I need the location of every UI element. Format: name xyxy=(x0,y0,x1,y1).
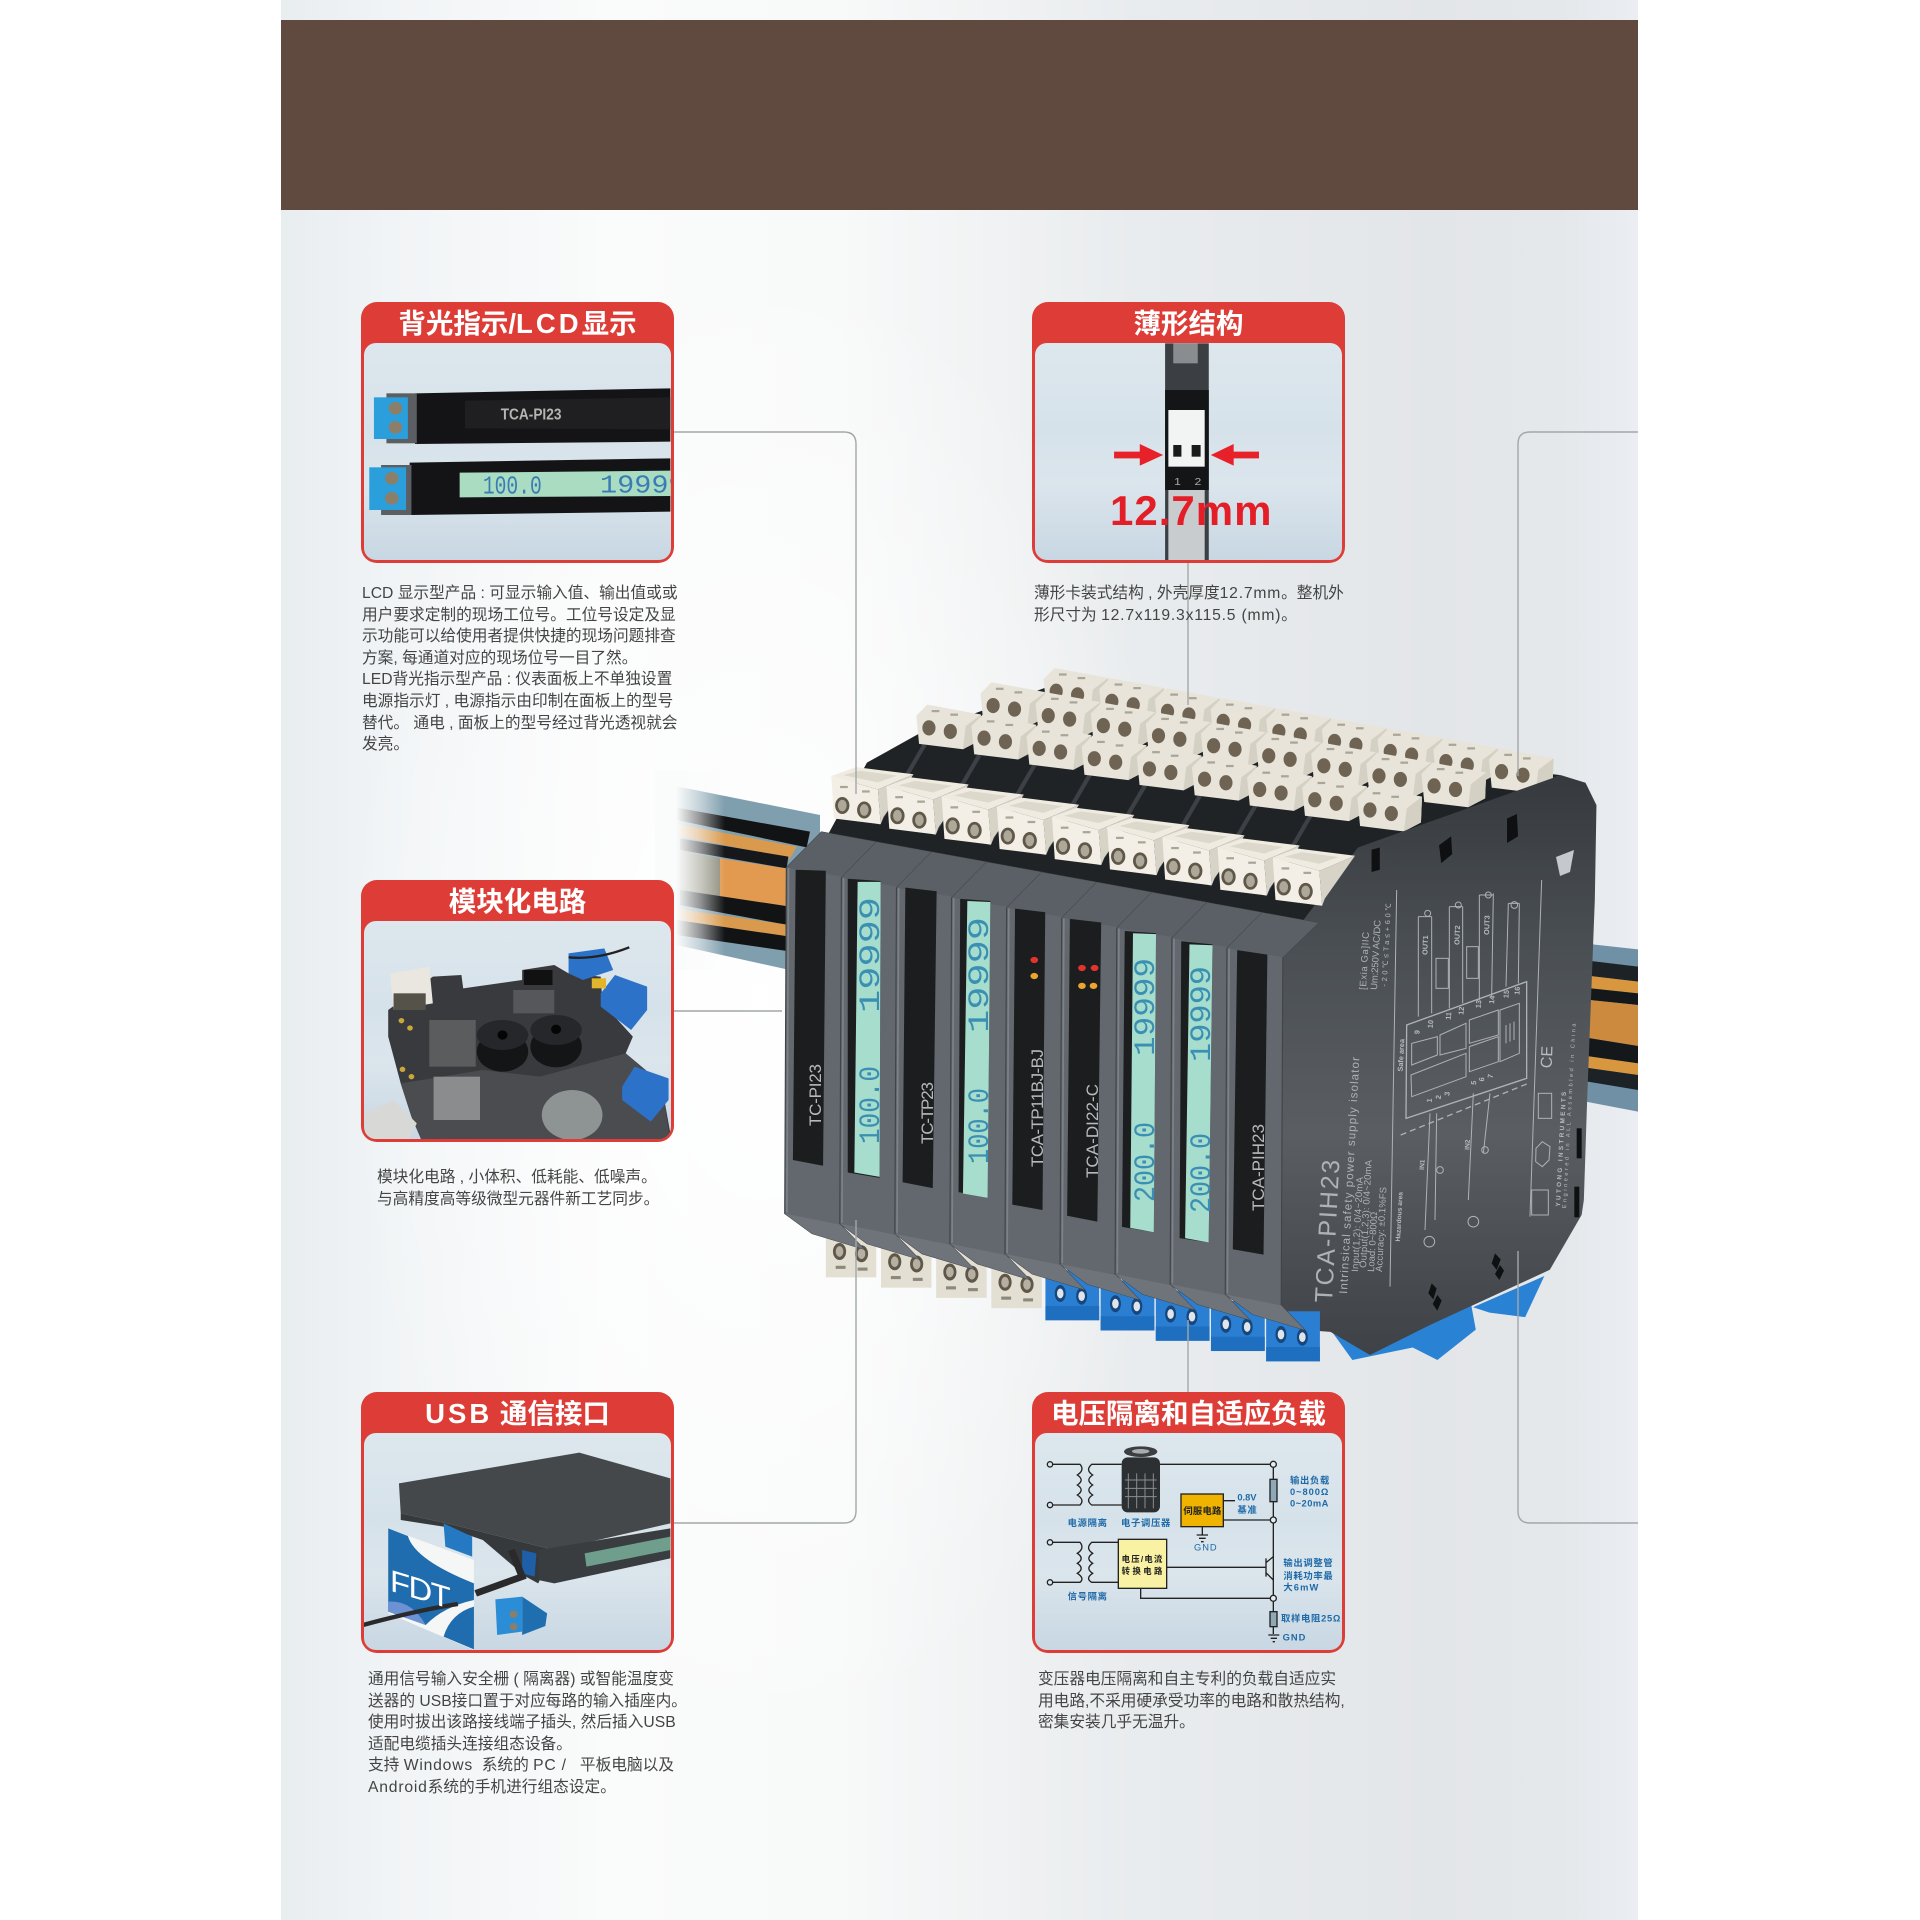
right DIN rail xyxy=(1577,943,1638,1112)
circuit labels: GND xyxy=(1283,1633,1306,1643)
text: LCD description: 示功能可以给使用者提供快捷的现场问题排查 xyxy=(362,628,676,645)
maker logo xyxy=(1556,850,1574,876)
silk text on side panel: 9 xyxy=(1412,1030,1422,1035)
photo: module end view with width arrows: 2 xyxy=(1194,477,1201,488)
photo: module end view with width arrows: 1 xyxy=(1174,477,1181,488)
side panel schematic xyxy=(1380,880,1582,1311)
circuit labels xyxy=(1068,1474,1341,1643)
text: modular circuit description xyxy=(377,1168,659,1208)
module labels: TCA-TP11BJ-BJ xyxy=(1028,1049,1047,1167)
module top ridges xyxy=(878,745,1310,896)
circuit labels: 电子调压器 xyxy=(1121,1517,1171,1528)
isolator module stack xyxy=(785,668,1596,1361)
front terminals xyxy=(831,767,1355,906)
text: USB description: 支持 Windows 系统的 PC / 平板电脑以及 xyxy=(368,1757,674,1774)
text: LCD description: 发亮。 xyxy=(362,736,409,753)
heading: voltage isolation: 电压隔离和自适应负载 xyxy=(1051,1398,1326,1429)
heading: modular circuit: 模块化电路 xyxy=(449,886,586,917)
silk text on side panel: 15 xyxy=(1501,990,1511,999)
module fronts xyxy=(785,832,1318,1330)
text: LCD description: 电源指示灯 , 电源指示由印制在面板上的型号 xyxy=(362,693,673,710)
regulator icon xyxy=(1122,1446,1160,1512)
side panel title text: Input(1,2): 0/4~20mA xyxy=(1350,1176,1366,1272)
silk text on side panel xyxy=(1380,902,1578,1242)
text: LCD description: LCD 显示型产品 : 可显示输入值、输出值或或 xyxy=(362,585,678,602)
circuit labels: 0.8V xyxy=(1237,1492,1257,1502)
left DIN rail xyxy=(670,785,820,977)
text: USB description: Android系统的手机进行组态设定。 xyxy=(368,1779,616,1796)
circuit labels: 0~20mA xyxy=(1290,1499,1329,1509)
converter box: 电压/电流 xyxy=(1122,1554,1163,1564)
text: voltage isolation description: 密集安装几乎无温升。 xyxy=(1038,1714,1195,1731)
text: voltage isolation description: 用电路,不采用硬承受功率的电路和散热结构, xyxy=(1038,1693,1345,1710)
circuit labels: 大6mW xyxy=(1283,1582,1319,1593)
LCD readouts xyxy=(855,897,1220,1213)
text: voltage isolation description xyxy=(1038,1670,1345,1731)
panel: modular circuit xyxy=(361,880,674,1142)
side panel title text: Intrinsical safety power supply isolator xyxy=(1338,1057,1362,1294)
status LEDs xyxy=(1030,957,1098,989)
photo: module end view with width arrows xyxy=(1035,343,1342,560)
servo circuit box: 伺服电路 xyxy=(1183,1505,1222,1516)
blue rear terminals xyxy=(1330,1276,1544,1360)
silk text on side panel: 10 xyxy=(1426,1020,1435,1029)
silk text on side panel: 3 xyxy=(1442,1091,1452,1096)
silk text on side panel: 14 xyxy=(1487,994,1497,1004)
module labels: TC-PI23 xyxy=(806,1064,825,1126)
silk text on side panel: Hazardous area xyxy=(1395,1192,1405,1242)
module labels: TCA-PIH23 xyxy=(1249,1124,1268,1211)
brown header block xyxy=(281,20,1638,210)
text: LCD description xyxy=(362,584,678,753)
side slots lower xyxy=(1428,1128,1582,1311)
text: LCD description: LED背光指示型产品 : 仪表面板上不单独设置 xyxy=(362,671,672,688)
silk text on side panel: -20℃≤Ta≤+60℃ xyxy=(1380,902,1393,987)
silk text on side panel: 13 xyxy=(1474,1000,1483,1009)
LCD readouts: 100.0 xyxy=(964,1088,998,1164)
silk text on side panel: CE xyxy=(1539,1046,1556,1068)
side panel title text xyxy=(1310,920,1389,1303)
text: LCD description: 方案, 每通道对应的现场位号一目了然。 xyxy=(362,650,637,667)
background band xyxy=(281,0,1638,1920)
side panel title text: Output(1,2,3): 0/4~20mA xyxy=(1358,1159,1375,1268)
silk text on side panel: OUT2 xyxy=(1452,925,1462,945)
text: USB description: 送器的 USB接口置于对应每路的输入插座内。 xyxy=(368,1693,687,1710)
dark top base xyxy=(826,687,1561,932)
circuit labels: 信号隔离 xyxy=(1068,1590,1107,1601)
circuit labels: GND xyxy=(1194,1542,1217,1552)
text: USB description: 使用时拔出该路接线端子插头, 然后插入USB xyxy=(368,1714,676,1731)
LCD readouts: 19999 xyxy=(1130,958,1164,1056)
converter box: 转换电路 xyxy=(1122,1566,1163,1576)
LCD readouts: 200.0 xyxy=(1186,1133,1220,1213)
silk text on side panel: 2 xyxy=(1434,1095,1443,1100)
circuit labels: 输出负载 xyxy=(1290,1474,1330,1485)
converter box xyxy=(1118,1539,1167,1588)
text: USB description xyxy=(368,1670,687,1796)
circuit diagram xyxy=(1035,1433,1342,1650)
photo: circuit board xyxy=(364,921,671,1139)
text: LCD description: 替代。 通电 , 面板上的型号经过背光透视就会 xyxy=(362,715,678,732)
photo: USB connection and FDT: FDT xyxy=(390,1563,451,1616)
side panel title text: Load: 0~800Ω xyxy=(1366,1212,1380,1272)
heading: USB interface: USB 通信接口 xyxy=(425,1398,610,1429)
silk text on side panel: OUT1 xyxy=(1420,935,1430,955)
photo: two black modules xyxy=(364,343,671,560)
LCD readouts: 19999 xyxy=(855,897,889,1013)
text: voltage isolation description: 变压器电压隔离和自主专利的负载自适应实 xyxy=(1038,1671,1336,1688)
silk text on side panel: 1 xyxy=(1425,1098,1434,1103)
circuit labels: 0~800Ω xyxy=(1290,1487,1329,1497)
silk text on side panel: OUT3 xyxy=(1482,915,1492,935)
LCD readouts: 19999 xyxy=(1186,966,1220,1062)
photo: USB connection and FDT xyxy=(364,1433,671,1650)
silk text on side panel: YUTONG INSTRUMENTS xyxy=(1555,1092,1568,1207)
text: thin structure description: 薄形卡装式结构 , 外壳厚度12.7mm。整机外 xyxy=(1034,585,1344,602)
servo circuit box xyxy=(1181,1494,1223,1527)
bottom terminals xyxy=(826,1229,1320,1361)
silk text on side panel: 6 xyxy=(1477,1077,1486,1082)
LCD screens xyxy=(854,882,1213,1243)
module windows xyxy=(793,870,1267,1255)
silk text on side panel: 7 xyxy=(1486,1074,1495,1079)
side panel title text: Um:250V AC/DC xyxy=(1369,920,1384,990)
module labels xyxy=(806,1049,1268,1211)
silk text on side panel: 5 xyxy=(1469,1080,1478,1085)
side panel title text: Accuracy: ±0.1%FS xyxy=(1374,1187,1389,1272)
side slots xyxy=(1372,814,1518,872)
heading: backlight / LCD: 背光指示/LCD显示 xyxy=(398,308,637,339)
heading: thin structure: 薄形结构 xyxy=(1134,308,1244,339)
text: USB description: 适配电缆插头连接组态设备。 xyxy=(368,1736,572,1753)
silk text on side panel: IN2 xyxy=(1464,1139,1472,1150)
rail left fade xyxy=(655,770,725,970)
photo: two black modules: 100.0 xyxy=(483,473,542,502)
circuit labels: 消耗功率最 xyxy=(1283,1570,1333,1581)
side face xyxy=(1281,775,1596,1355)
silk text on side panel: 11 xyxy=(1444,1012,1453,1020)
side panel title text: TCA-PIH23 xyxy=(1310,1159,1345,1303)
panel: voltage isolation and adaptive load xyxy=(1032,1392,1345,1653)
circuit labels: 电源隔离 xyxy=(1068,1517,1107,1528)
panel: backlight / LCD display xyxy=(361,302,674,563)
rear terminal rows xyxy=(916,668,1554,831)
circuit labels: 输出调整管 xyxy=(1283,1557,1333,1568)
silk text on side panel: Safe area xyxy=(1396,1038,1406,1072)
silk text on side panel: IN1 xyxy=(1419,1159,1427,1170)
text: USB description: 通用信号输入安全栅 ( 隔离器) 或智能温度变 xyxy=(368,1671,674,1688)
silk text on side panel: Engineered in ALL Assembled in China xyxy=(1562,1023,1578,1208)
silk text on side panel: 16 xyxy=(1512,986,1522,995)
LCD readouts: 200.0 xyxy=(1130,1122,1164,1202)
panel: USB interface xyxy=(361,1392,674,1653)
LCD readouts: 100.0 xyxy=(855,1066,889,1144)
text: modular circuit description: 与高精度高等级微型元器件新工艺同步。 xyxy=(377,1191,659,1208)
circuit labels: 取样电阻25Ω xyxy=(1281,1612,1341,1623)
text: modular circuit description: 模块化电路 , 小体积、低耗能、低噪声。 xyxy=(377,1169,657,1186)
connector lines xyxy=(673,432,1638,1523)
module labels: TC-TP23 xyxy=(918,1082,937,1144)
silk text on side panel: 12 xyxy=(1456,1006,1466,1015)
photo: two black modules: TCA-PI23 xyxy=(501,407,562,423)
text: thin structure description xyxy=(1034,584,1344,624)
side panel title text: [Exia Ga]IIC xyxy=(1358,932,1372,990)
circuit labels: 基准 xyxy=(1237,1504,1257,1515)
text: LCD description: 用户要求定制的现场工位号。工位号设定及显 xyxy=(362,607,676,624)
LCD readouts: 19999 xyxy=(964,917,998,1033)
module labels: TCA-DI22-C xyxy=(1083,1084,1102,1178)
photo: module end view with width arrows: 12.7mm xyxy=(1110,487,1272,534)
text: thin structure description: 形尺寸为 12.7x119.3x115.5 (mm)。 xyxy=(1034,607,1297,624)
panel: thin structure xyxy=(1032,302,1345,563)
